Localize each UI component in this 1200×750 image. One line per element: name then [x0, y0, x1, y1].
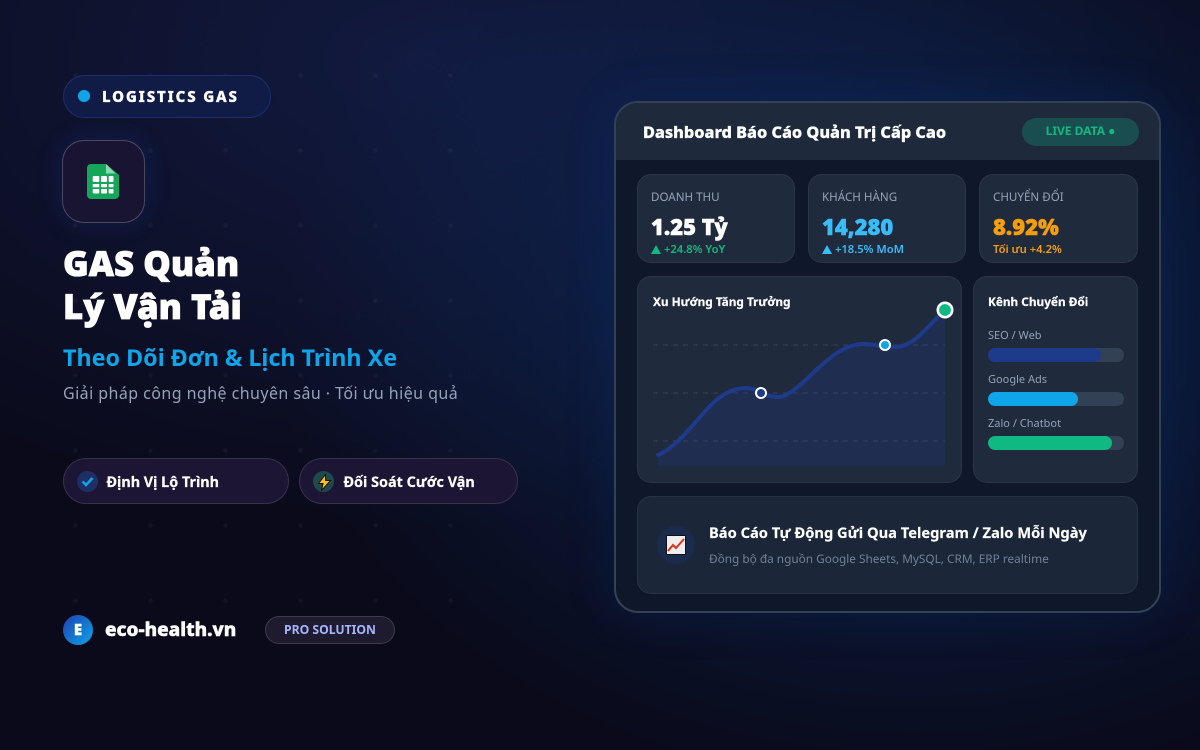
kpi card: conversion: Tối ưu +4.2%: [993, 242, 1062, 257]
bar: google ads: Google Ads: [988, 372, 1047, 387]
kpi card: revenue: 1.25 Tỷ: [651, 212, 728, 242]
kpi card: customers: 14,280: [822, 212, 893, 242]
panel: conversion channels: [973, 276, 1138, 483]
dashboard title: Dashboard Báo Cáo Quản Trị Cấp Cao: [643, 121, 946, 143]
badge: pro solution: PRO SOLUTION: [284, 621, 376, 638]
chart title: Xu Hướng Tăng Trưởng: [653, 294, 791, 310]
icon: chart emoji: [657, 526, 695, 564]
banner heading: Báo Cáo Tự Động Gửi Qua Telegram / Zalo Mỗi Ngày: [709, 523, 1087, 543]
bar: zalo: Zalo / Chatbot: [988, 416, 1061, 431]
live data pill: [1022, 118, 1139, 146]
title: GAS Quản: [63, 240, 239, 287]
footer logo: E: [74, 620, 82, 640]
title: Lý Vận Tải: [63, 283, 242, 330]
badge: pro solution: [265, 616, 395, 644]
kpi card: conversion: 8.92%: [993, 212, 1059, 242]
panel: dashboard: [614, 101, 1161, 613]
kpi card: customers: KHÁCH HÀNG: [822, 190, 897, 205]
kpi card: revenue: [637, 174, 795, 263]
kpi card: revenue: +24.8% YoY: [664, 242, 725, 257]
subtitle: Theo Dõi Đơn & Lịch Trình Xe: [63, 341, 397, 373]
kpi card: customers: [808, 174, 966, 263]
line chart: [653, 302, 954, 466]
description: Giải pháp công nghệ chuyên sâu · Tối ưu hiệu quả: [63, 382, 458, 404]
footer logo: [63, 615, 93, 645]
feature chip: route: Định Vị Lộ Trình: [106, 473, 219, 492]
feature chip: freight: Đối Soát Cước Vận: [344, 473, 475, 492]
bar: seo: SEO / Web: [988, 328, 1042, 343]
badge: logistics gas: LOGISTICS GAS: [102, 86, 239, 106]
kpi card: customers: +18.5% MoM: [835, 242, 904, 257]
feature chip: route: [62, 458, 288, 504]
channels title: Kênh Chuyển Đổi: [988, 294, 1088, 310]
live data pill: LIVE DATA ●: [1046, 122, 1115, 139]
panel: growth chart: [637, 276, 962, 483]
title: [63, 240, 242, 330]
feature chip: freight: [299, 458, 518, 504]
panel: automation banner: [637, 496, 1138, 594]
footer domain: eco-health.vn: [105, 616, 236, 642]
badge: logistics gas: [62, 74, 270, 118]
icon: google sheets: [62, 140, 145, 223]
kpi card: revenue: DOANH THU: [651, 190, 720, 205]
dashboard header: [616, 103, 1161, 160]
kpi card: conversion: CHUYỂN ĐỔI: [993, 190, 1064, 205]
banner text: Đồng bộ đa nguồn Google Sheets, MySQL, CRM, ERP realtime: [709, 551, 1049, 567]
kpi card: conversion: [979, 174, 1138, 263]
